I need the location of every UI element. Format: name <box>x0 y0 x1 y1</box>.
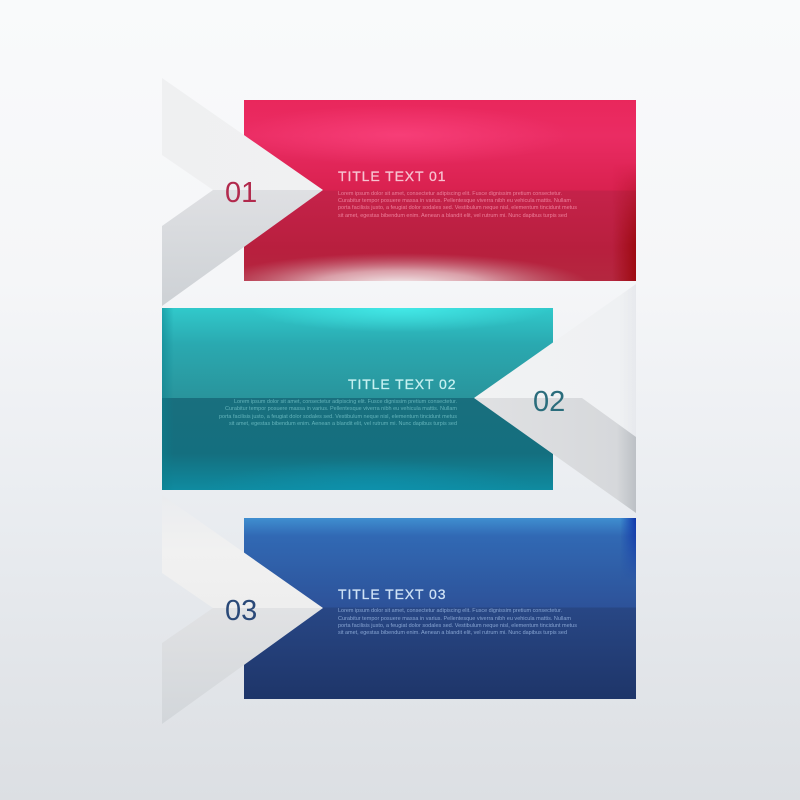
teal banner <box>162 308 553 490</box>
body text 02: Lorem ipsum dolor sit amet, consectetur adipiscing elit. Fusce dignissim pretium consectetur. <box>234 399 457 405</box>
number 03: 03 <box>225 595 257 627</box>
body text 03 <box>338 608 577 636</box>
blue banner <box>244 518 636 699</box>
arrow 03 <box>162 495 323 724</box>
red banner <box>244 100 636 281</box>
body text 01: Curabitur tempor posuere massa in varius. Pellentesque viverra nibh eu vehicula mattis. Nullam <box>338 198 572 204</box>
body text 03: porta facilisis justo, a feugiat dolor sodales sed. Vestibulum neque nisl, elementum tincidunt metus <box>338 623 577 629</box>
panel: step 02 <box>162 284 636 520</box>
body text 01: porta facilisis justo, a feugiat dolor sodales sed. Vestibulum neque nisl, elementum tincidunt metus <box>338 205 577 211</box>
body text 03: Lorem ipsum dolor sit amet, consectetur adipiscing elit. Fusce dignissim pretium consectetur. <box>338 608 562 614</box>
body text 02: porta facilisis justo, a feugiat dolor sodales sed. Vestibulum neque nisl, elementum tincidunt metus <box>219 414 457 420</box>
body text 02: sit amet, egestas bibendum enim. Aenean a blandit elit, vel rutrum mi. Nunc dapibus turpis sed <box>229 421 457 427</box>
title 01: TITLE TEXT 01 <box>338 168 447 184</box>
number 02: 02 <box>533 386 565 418</box>
body text 02 <box>219 399 458 427</box>
body text 01: Lorem ipsum dolor sit amet, consectetur adipiscing elit. Fusce dignissim pretium consectetur. <box>338 191 562 197</box>
body text 02: Curabitur tempor posuere massa in varius. Pellentesque viverra nibh eu vehicula mattis. Nullam <box>225 406 458 412</box>
arrow 02 <box>474 284 636 513</box>
arrow 01 <box>162 78 323 306</box>
body text 03: sit amet, egestas bibendum enim. Aenean a blandit elit, vel rutrum mi. Nunc dapibus turpis sed <box>338 630 567 636</box>
number 01: 01 <box>225 177 257 209</box>
body text 01 <box>338 191 577 219</box>
panel: step 01 <box>162 78 636 317</box>
body text 01: sit amet, egestas bibendum enim. Aenean a blandit elit, vel rutrum mi. Nunc dapibus turpis sed <box>338 213 567 219</box>
title 03: TITLE TEXT 03 <box>338 586 447 602</box>
body text 03: Curabitur tempor posuere massa in varius. Pellentesque viverra nibh eu vehicula mattis. Nullam <box>338 616 572 622</box>
panel: step 03 <box>162 518 636 724</box>
title 02: TITLE TEXT 02 <box>348 376 457 392</box>
